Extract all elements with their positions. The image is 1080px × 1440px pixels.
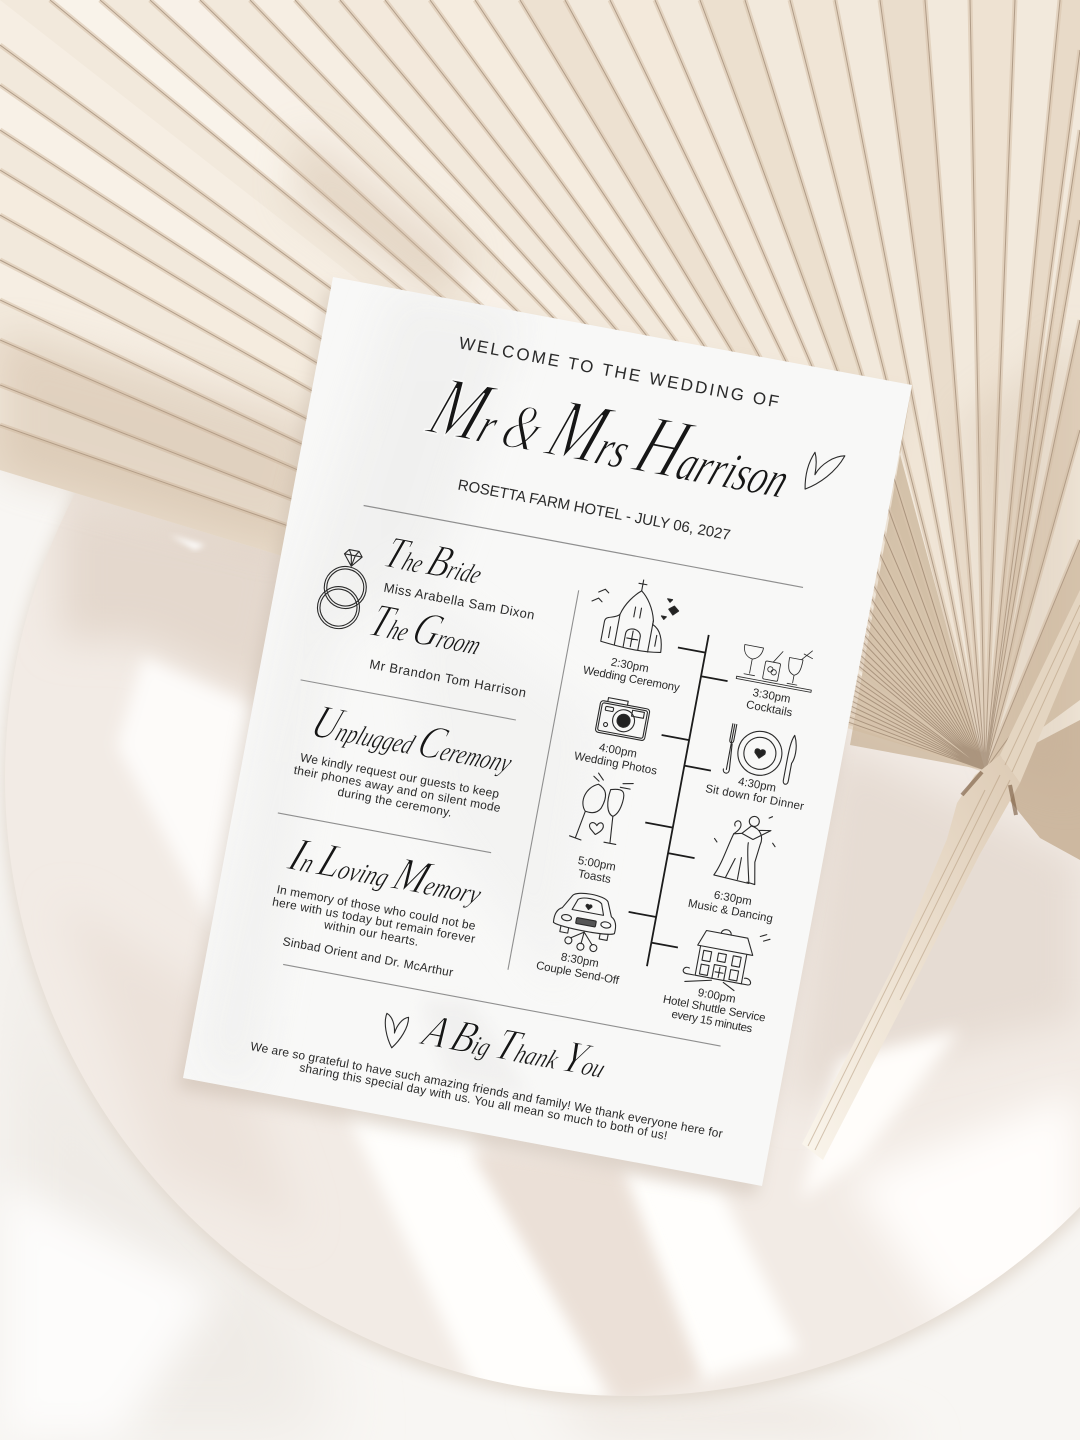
event label: send-off: Couple Send-Off — [535, 960, 621, 987]
plate — [0, 492, 1080, 1406]
panel: wedding photos event — [573, 693, 669, 778]
event label: dinner: 4:30pm — [737, 776, 777, 795]
event label: cocktails: 3:30pm — [752, 687, 791, 706]
panel: in loving memory — [264, 826, 493, 983]
text: names remembered: Sinbad Orient and Dr. McArthur — [282, 934, 454, 980]
heading: the bride: The Bride — [377, 528, 493, 594]
icon: dancing couple — [708, 807, 780, 887]
icon: church — [585, 571, 683, 657]
text: unplugged request: We kindly request our guests to keep — [299, 750, 501, 801]
panel: unplugged ceremony — [290, 693, 524, 830]
text: memorial message: In memory of those who could not be — [276, 882, 477, 933]
event label: wedding photos: 4:00pm — [598, 742, 638, 761]
icon: cocktails — [736, 638, 818, 692]
light streaks on card — [405, 538, 410, 539]
text: thank you message: sharing this special day with us. You all mean so much to both of us! — [298, 1060, 668, 1143]
heading: in loving memory: In Loving Memory — [281, 829, 493, 914]
panel: wedding ceremony event — [578, 571, 698, 694]
icon: champagne glasses — [569, 770, 634, 847]
heading: welcome: WELCOME TO THE WEDDING OF — [457, 333, 780, 412]
icon: plate and cutlery — [723, 724, 799, 785]
text: unplugged request: their phones away and on silent mode — [293, 763, 502, 815]
icon: hotel — [681, 921, 771, 995]
icon: small heart — [380, 1013, 409, 1050]
event label: toasts: Toasts — [577, 868, 612, 886]
event label: dancing: 6:30pm — [713, 889, 753, 908]
event label: dancing: Music & Dancing — [687, 898, 774, 925]
text: unplugged request: during the ceremony. — [336, 785, 453, 820]
timeline spine and ticks — [619, 630, 735, 971]
icon: heart — [804, 450, 845, 495]
divider — [283, 964, 721, 1046]
panel: bride and groom — [307, 517, 551, 700]
palm stem — [802, 590, 1080, 1160]
panel: hotel shuttle event — [660, 918, 781, 1037]
icon: getaway car — [549, 888, 621, 956]
top divider — [364, 505, 803, 587]
title: couple name: Mr & Mrs Harrison — [415, 359, 810, 515]
event label: wedding ceremony: Wedding Ceremony — [582, 665, 681, 694]
divider — [278, 813, 491, 853]
event label: wedding ceremony: 2:30pm — [610, 657, 650, 675]
panel: thank you — [247, 975, 736, 1153]
text: memorial message: within our hearts. — [322, 917, 420, 949]
panel: dinner event — [704, 721, 817, 813]
event label: cocktails: Cocktails — [745, 699, 793, 719]
palm leaf — [0, 0, 1080, 860]
groom name: Mr Brandon Tom Harrison — [368, 656, 527, 700]
event label: hotel shuttle: Hotel Shuttle Service — [662, 994, 766, 1025]
event label: wedding photos: Wedding Photos — [573, 750, 658, 778]
panel: wedding card — [183, 277, 912, 1186]
heading: unplugged ceremony: Unplugged Ceremony — [304, 696, 524, 783]
divider — [301, 680, 516, 720]
bride name: Miss Arabella Sam Dixon — [383, 580, 536, 623]
card shadow — [177, 287, 906, 1196]
column divider — [508, 590, 579, 970]
panel: send-off event — [535, 887, 634, 987]
panel: cocktails event — [731, 638, 818, 722]
event label: hotel shuttle: 9:00pm — [697, 987, 737, 1006]
text: memorial message: here with us today but remain forever — [271, 895, 476, 946]
event label: toasts: 5:00pm — [577, 855, 617, 874]
event label: send-off: 8:30pm — [560, 951, 600, 970]
icon: camera — [595, 696, 651, 741]
heading: the groom: The Groom — [362, 595, 492, 665]
panel: toasts event — [562, 770, 634, 887]
heading: a big thank you: A Big Thank You — [413, 1006, 616, 1088]
icon: wedding rings — [314, 546, 373, 633]
event label: dinner: Sit down for Dinner — [704, 783, 805, 813]
event label: hotel shuttle: every 15 minutes — [670, 1009, 753, 1035]
venue and date: ROSETTA FARM HOTEL - JULY 06, 2027 — [456, 477, 732, 544]
text: thank you message: We are so grateful to have such amazing friends and family! We thank everyone here for — [249, 1039, 724, 1141]
panel: dancing event — [687, 804, 791, 925]
